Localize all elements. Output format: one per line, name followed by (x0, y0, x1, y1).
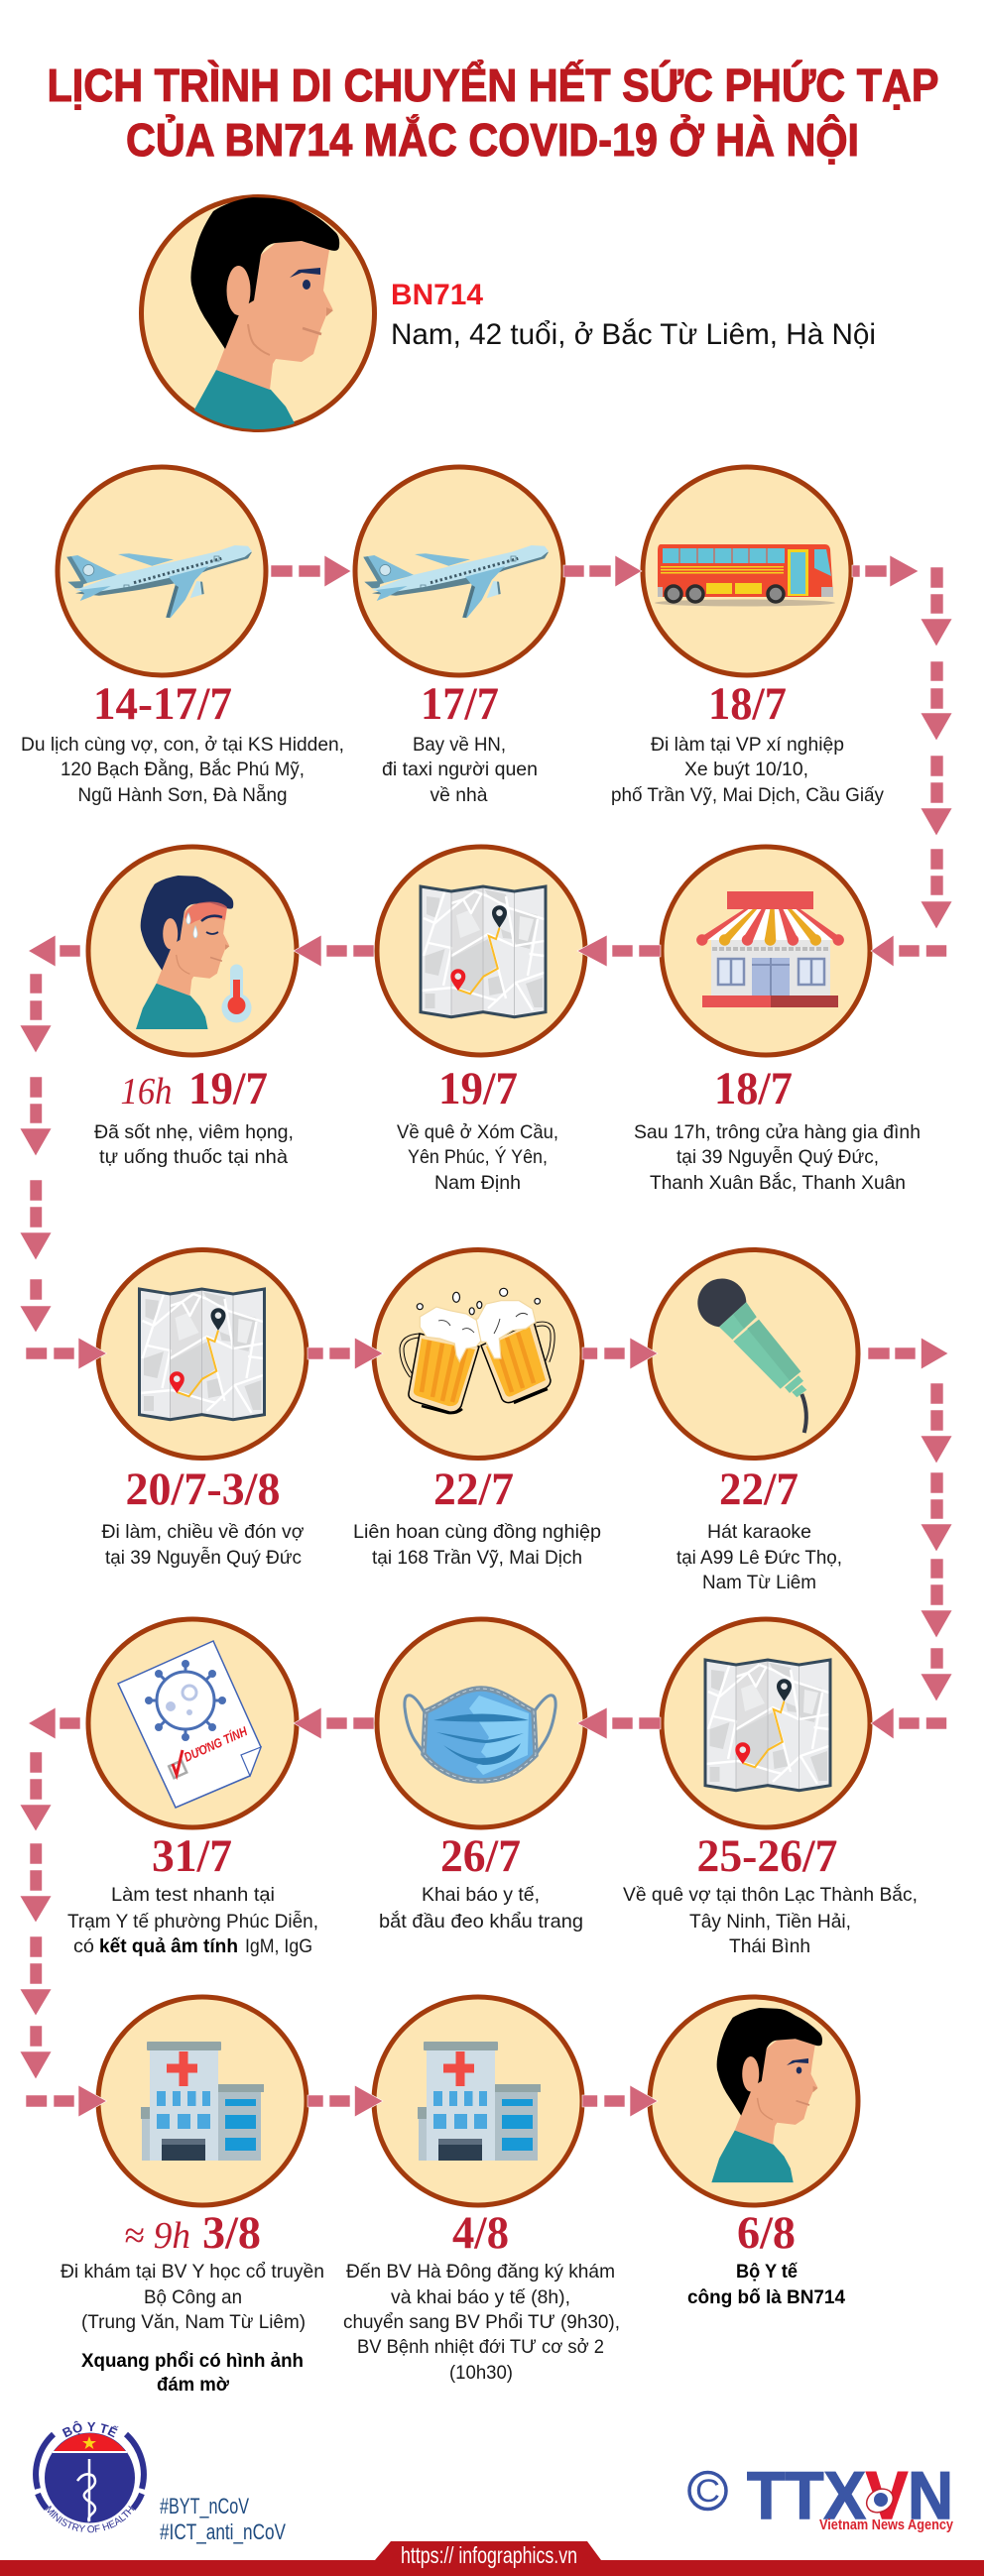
date: 6/8 (737, 2207, 796, 2259)
icon: feverish man with thermometer (88, 847, 297, 1055)
copyright symbol (689, 2473, 726, 2509)
date: 22/7 (433, 1464, 514, 1515)
date: 20/7-3/8 (125, 1464, 280, 1515)
date: 4/8 (452, 2207, 509, 2259)
panel: patient profile (141, 196, 876, 443)
description (397, 1121, 558, 1194)
time and date: 3/8 (202, 2207, 261, 2259)
date: 17/7 (421, 678, 499, 730)
arrow: 25-26/7 to mask (577, 1707, 661, 1739)
date: 18/7 (714, 1063, 793, 1114)
description (94, 1121, 294, 1168)
icon: map (662, 1619, 870, 1827)
arrow: down left side second (20, 1752, 52, 2079)
copyright symbol: C (695, 2473, 720, 2509)
arrow: 4/8 to 6/8 (582, 2085, 658, 2117)
description: Bộ Công an (144, 2286, 242, 2308)
arrow: beer to karaoke (582, 1338, 658, 1369)
description: Sau 17h, trông cửa hàng gia đình (634, 1121, 921, 1143)
description: Thanh Xuân Bắc, Thanh Xuân (650, 1171, 906, 1194)
logo: TTXVN Vietnam News Agency: Vietnam News Agency (819, 2517, 954, 2533)
description (343, 2261, 620, 2384)
description (67, 1884, 318, 1957)
icon: face mask (377, 1619, 585, 1827)
date: 25-26/7 (696, 1830, 837, 1882)
icon: test result document: DƯƠNG TÍNH (182, 1723, 250, 1765)
icon: map (377, 847, 585, 1055)
description (353, 1521, 601, 1569)
icon: map (98, 1249, 307, 1458)
description: Đi khám tại BV Y học cổ truyền (61, 2261, 324, 2283)
description: Bay về HN, (413, 734, 506, 756)
description: phố Trần Vỹ, Mai Dịch, Cầu Giấy (611, 784, 884, 806)
description: Xquang phổi có hình ảnh (81, 2350, 304, 2372)
icon: patient portrait (141, 196, 375, 443)
arrow: mask to test (294, 1707, 374, 1739)
description (611, 734, 884, 806)
icon: bus (643, 467, 851, 675)
description: Bộ Y tế (736, 2261, 798, 2283)
description: Trạm Y tế phường Phúc Diễn, (67, 1910, 318, 1932)
icon: beer mugs (374, 1249, 582, 1458)
description: tại 168 Trần Vỹ, Mai Dịch (372, 1547, 582, 1569)
description: tự uống thuốc tại nhà (99, 1146, 288, 1168)
panel: 20/7-3/8 (98, 1249, 307, 1569)
time and date (121, 1063, 268, 1114)
logo: Ministry of Health (33, 2421, 147, 2532)
arrow: 18/7 bus turn (852, 555, 919, 587)
description: tại 39 Nguyễn Quý Đức, (676, 1145, 879, 1168)
description: Hát karaoke (707, 1521, 811, 1543)
arrow: 17/7 to 18/7 (563, 555, 642, 587)
arrow: into 3/8 (26, 2085, 107, 2117)
time and date (124, 2207, 261, 2259)
description: Xe buýt 10/10, (684, 759, 808, 780)
footer bar: https:// infographics.vn (401, 2542, 577, 2568)
patient code: BN714 (391, 279, 483, 311)
icon: hospital (374, 1997, 582, 2205)
panel: 6/8 (650, 1997, 858, 2308)
arrow: shop to map (577, 935, 661, 967)
icon: microphone (650, 1249, 858, 1458)
description (21, 734, 344, 806)
description (101, 1521, 305, 1569)
description (687, 2261, 845, 2308)
arrow: fever leftward (28, 935, 80, 967)
arrow: down right side second (921, 1383, 952, 1701)
description: công bố là BN714 (687, 2286, 845, 2308)
title (48, 59, 938, 166)
description: Đi làm tại VP xí nghiệp (651, 734, 844, 756)
right mug (481, 1322, 551, 1403)
description: Về quê ở Xóm Cầu, (397, 1121, 558, 1143)
description (379, 1884, 583, 1932)
description: (10h30) (449, 2362, 513, 2384)
arrow: karaoke rightward (868, 1338, 948, 1369)
date: 19/7 (438, 1063, 518, 1114)
description (676, 1521, 842, 1593)
description (634, 1121, 921, 1194)
description: Liên hoan cùng đồng nghiệp (353, 1521, 601, 1543)
title: CỦA BN714 MẮC COVID-19 Ở HÀ NỘI (126, 114, 859, 166)
right handle (536, 1324, 553, 1361)
date: 18/7 (708, 678, 787, 730)
description: có (73, 1935, 94, 1957)
panel: 25-26/7 (623, 1619, 918, 1957)
description: về nhà (430, 784, 488, 806)
description: chuyển sang BV Phổi TƯ (9h30), (343, 2311, 620, 2333)
description (623, 1883, 918, 1957)
description: BV Bệnh nhiệt đới TƯ cơ sở 2 (357, 2336, 604, 2358)
panel: 17/7 (355, 467, 563, 806)
description: Làm test nhanh tại (111, 1884, 275, 1906)
description: và khai báo y tế (8h), (391, 2286, 570, 2308)
left handle (402, 1336, 420, 1376)
description (61, 2261, 324, 2396)
description: (Trung Văn, Nam Từ Liêm) (81, 2311, 306, 2333)
description (382, 734, 538, 806)
description: đi taxi người quen (382, 759, 538, 780)
foam (420, 1307, 484, 1361)
arrow: 14-17/7 to 17/7 (271, 555, 351, 587)
description: tại 39 Nguyễn Quý Đức (105, 1546, 302, 1569)
description: Tây Ninh, Tiền Hải, (689, 1911, 851, 1932)
left mug (409, 1334, 479, 1412)
description: Khai báo y tế, (422, 1884, 540, 1906)
time and date: 19/7 (188, 1063, 268, 1114)
time and date: ≈ 9h (124, 2215, 190, 2257)
icon: hospital (98, 1997, 307, 2205)
hashtags: #ICT_anti_nCoV (160, 2519, 286, 2544)
arrow: into 25-26/7 (871, 1707, 946, 1739)
arrow: into shop (871, 935, 946, 967)
description: Nam Từ Liêm (702, 1572, 816, 1593)
icon: patient portrait (650, 1997, 858, 2205)
panel: 31/7 (67, 1619, 318, 1957)
description: Du lịch cùng vợ, con, ở tại KS Hidden, (21, 734, 344, 756)
date: 31/7 (152, 1830, 232, 1882)
description: Yên Phúc, Ý Yên, (408, 1145, 548, 1168)
icon: test result document (88, 1619, 297, 1827)
time and date: 16h (121, 1071, 173, 1112)
description: Về quê vợ tại thôn Lạc Thành Bắc, (623, 1883, 918, 1906)
arrow: into 20/7 (26, 1338, 107, 1369)
footer bar (0, 2541, 984, 2576)
panel: 26/7 (377, 1619, 585, 1932)
description: tại A99 Lê Đức Thọ, (676, 1547, 842, 1569)
description: 120 Bạch Đằng, Bắc Phú Mỹ, (61, 758, 305, 780)
date: 14-17/7 (93, 678, 232, 730)
description: Nam Định (434, 1172, 521, 1194)
icon: airplane (355, 467, 563, 675)
arrow: test leftward (28, 1707, 80, 1739)
arrow: map to fever (294, 935, 374, 967)
description: Thái Bình (729, 1935, 810, 1957)
panel: 18/7 shop (634, 847, 921, 1194)
panel: 14-17/7 (21, 467, 344, 806)
hashtags: #BYT_nCoV (160, 2494, 249, 2518)
panel: 4/8 (343, 1997, 620, 2384)
description: đám mờ (157, 2374, 229, 2396)
panel: 3/8 (61, 1997, 324, 2396)
arrow: 3/8 to 4/8 (308, 2085, 383, 2117)
description: Ngũ Hành Sơn, Đà Nẵng (77, 783, 288, 806)
patient description: Nam, 42 tuổi, ở Bắc Từ Liêm, Hà Nội (391, 318, 876, 351)
description: Đã sốt nhẹ, viêm họng, (94, 1121, 294, 1143)
panel: 22/7 karaoke (650, 1249, 858, 1593)
icon: airplane (58, 467, 266, 675)
description: Đi làm, chiều về đón vợ (101, 1521, 305, 1543)
hashtags (160, 2494, 286, 2544)
panel: 18/7 bus (611, 467, 884, 806)
panel: 16h 19/7 fever (88, 847, 297, 1168)
logo: Ministry of Health: MINISTRY OF HEALTH (46, 2506, 135, 2532)
arrow: down right side to shop (921, 567, 952, 929)
date: 22/7 (719, 1464, 799, 1515)
logo: Ministry of Health: BỘ Y TẾ (62, 2421, 119, 2437)
panel: 22/7 party (353, 1249, 601, 1569)
icon: shop (662, 847, 870, 1055)
arrow: down left side (20, 974, 52, 1333)
description: IgM, IgG (245, 1935, 312, 1957)
description: Đến BV Hà Đông đăng ký khám (346, 2261, 615, 2283)
logo: TTXVN Vietnam News Agency: TTXVN (747, 2458, 953, 2533)
date: 26/7 (440, 1830, 521, 1882)
description: kết quả âm tính (99, 1935, 238, 1957)
arrow: 20/7 to beer (308, 1338, 383, 1369)
panel: 19/7 hometown (377, 847, 585, 1194)
description: bắt đầu đeo khẩu trang (379, 1910, 583, 1932)
